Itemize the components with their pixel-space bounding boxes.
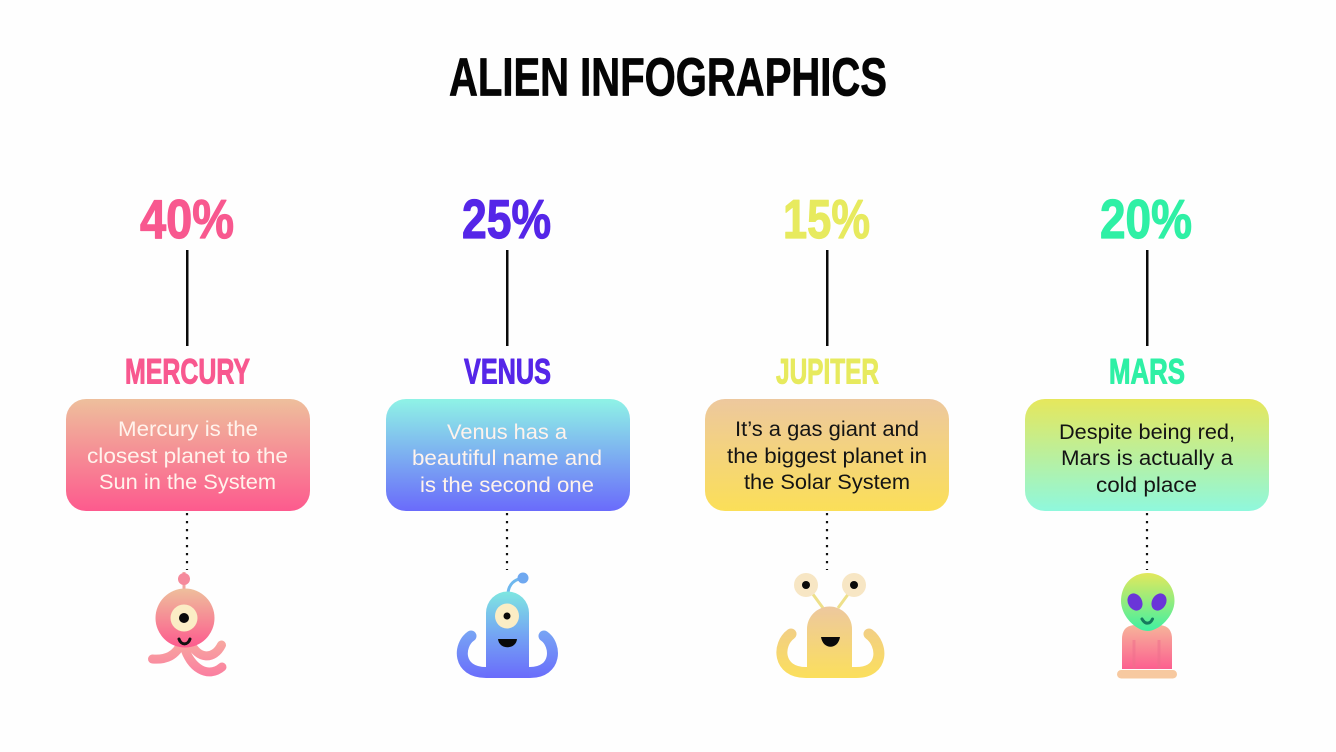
dotted connector: Jupiter [826, 513, 828, 570]
dotted connector: Mercury [186, 513, 188, 570]
description box: Jupiter: the Solar System [744, 470, 910, 494]
description box: Jupiter: It’s a gas giant and [735, 417, 919, 441]
heading: Mercury: MERCURY [125, 352, 250, 392]
connector line: Jupiter [826, 250, 828, 346]
column: Mars [1025, 188, 1269, 678]
heading: Jupiter: JUPITER [776, 352, 879, 392]
description box: Venus: Venus has a [447, 420, 567, 444]
description box: Venus: is the second one [420, 473, 594, 497]
description box: Jupiter [705, 399, 949, 511]
percentage: 40%: 40% [140, 188, 234, 250]
description box: Mars [1025, 399, 1269, 511]
column: Venus [386, 188, 630, 678]
title: ALIEN INFOGRAPHICS [449, 48, 887, 108]
description box: Mars: Mars is actually a [1061, 446, 1233, 470]
connector line: Mercury [186, 250, 188, 346]
icon: green alien [1117, 573, 1177, 678]
heading: Mars: MARS [1109, 352, 1185, 392]
description box: Mars: Despite being red, [1059, 420, 1235, 444]
description box: Venus: beautiful name and [412, 446, 602, 470]
description box: Mars: cold place [1096, 473, 1197, 497]
icon: one-eyed blue alien [462, 572, 552, 678]
description box: Mercury: closest planet to the [87, 444, 288, 468]
icon: one-eyed octopus alien [152, 572, 222, 672]
percentage: 20%: 20% [1100, 188, 1192, 250]
description box: Venus [386, 399, 630, 511]
description box: Mercury: Sun in the System [99, 470, 276, 494]
connector line: Mars [1146, 250, 1148, 346]
connector line: Venus [506, 250, 508, 346]
description box: Mercury [66, 399, 310, 511]
column: Mercury [66, 188, 310, 672]
icon: eye-stalk yellow alien [782, 573, 879, 678]
percentage: 25%: 25% [462, 188, 551, 250]
percentage: 15%: 15% [783, 188, 870, 250]
description box: Mercury: Mercury is the [118, 417, 258, 441]
dotted connector: Mars [1146, 513, 1148, 570]
heading: Venus: VENUS [464, 352, 551, 392]
column: Jupiter [705, 188, 949, 678]
dotted connector: Venus [506, 513, 508, 570]
description box: Jupiter: the biggest planet in [727, 444, 927, 468]
